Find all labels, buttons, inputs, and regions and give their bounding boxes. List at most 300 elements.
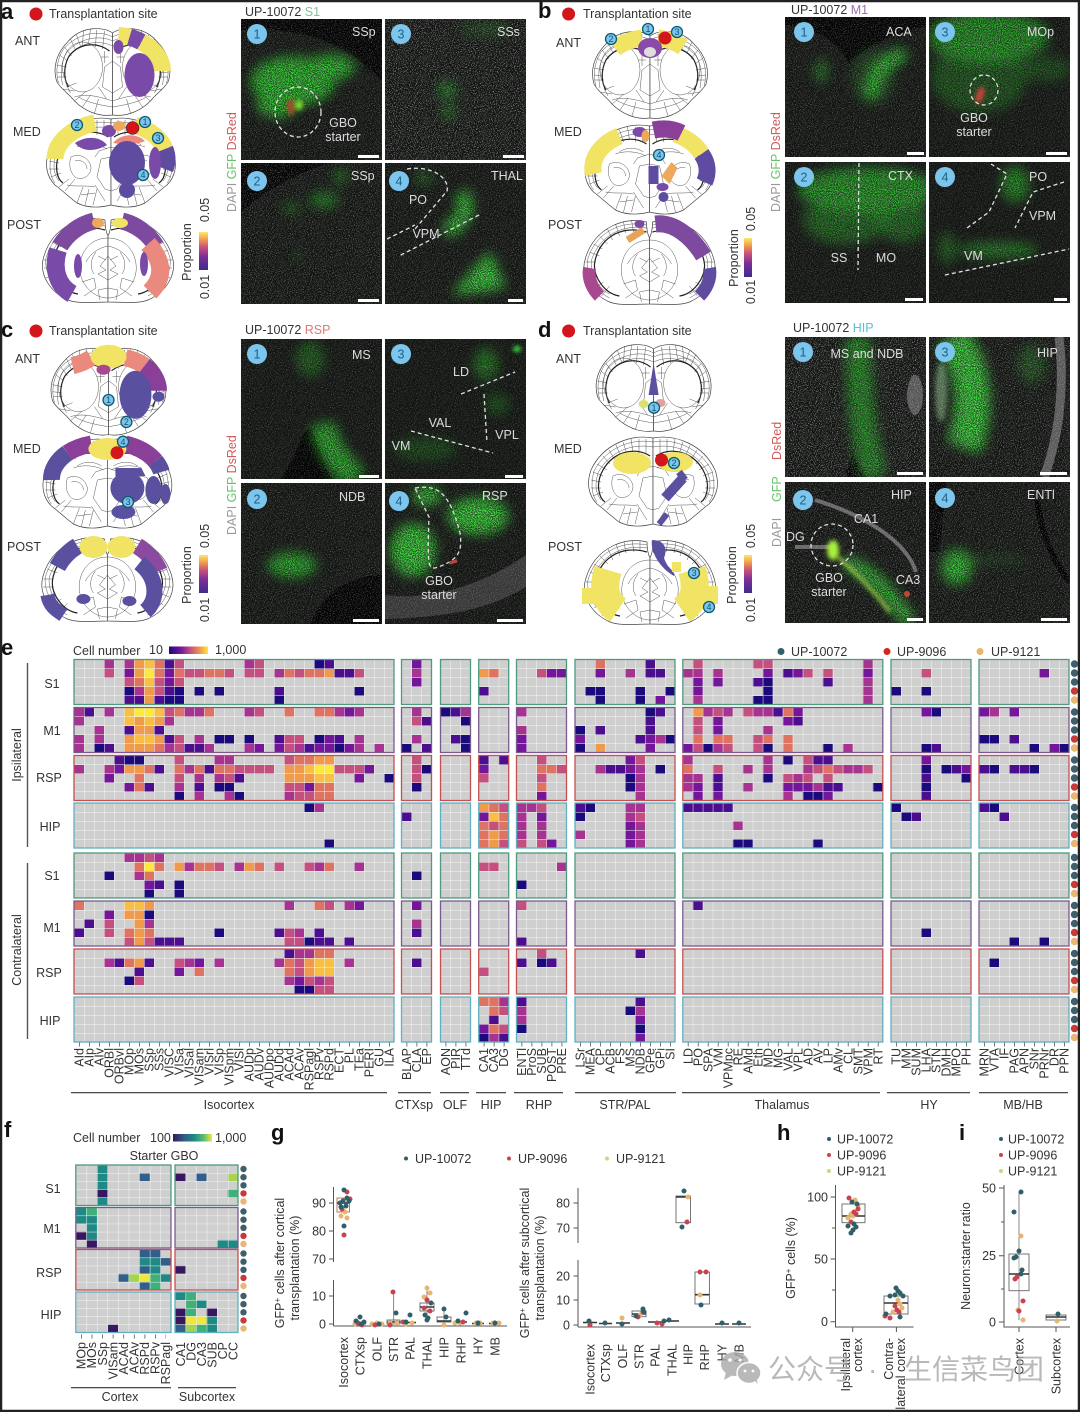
brain section MED: MED xyxy=(554,125,582,139)
region group rules and names: RHP xyxy=(526,1098,552,1112)
micrograph c3 LD VAL VPL VM: VAL xyxy=(429,416,451,430)
column labels: CA1 xyxy=(477,1048,491,1072)
column labels: DG xyxy=(497,1048,511,1067)
column labels: PH xyxy=(960,1048,974,1065)
row labels: S1 xyxy=(44,677,60,691)
chart: after subcortical transplantation: cells after subcortical xyxy=(518,1188,532,1308)
column labels: AIv xyxy=(92,1047,106,1066)
chart: after cortical transplantation: HIP xyxy=(438,1337,452,1358)
row labels: HIP xyxy=(41,1308,61,1322)
colour scale: cell number xyxy=(73,1131,246,1145)
micrograph b4 PO VPM VM: 4 xyxy=(942,170,949,184)
stain labels: DAPI GFP DsRed xyxy=(769,112,783,212)
micrograph b3 MOp xyxy=(929,17,1070,157)
brain section POST xyxy=(7,218,174,302)
brain section ANT: ANT xyxy=(15,352,40,366)
micrograph c4 RSP: starter xyxy=(421,588,457,602)
badges and injection site: 1 xyxy=(106,395,111,405)
chart: after subcortical transplantation: THAL xyxy=(666,1344,680,1376)
column labels: TEa xyxy=(352,1048,366,1071)
chart: after subcortical transplantation: PAL xyxy=(648,1344,662,1367)
panel letter h: h xyxy=(777,1120,790,1145)
contralateral bracket: Contralateral xyxy=(10,914,24,986)
region group rules and names: HIP xyxy=(481,1098,501,1112)
badges and injection site: 2 xyxy=(671,458,677,468)
micrograph a2 SSp: 2 xyxy=(254,174,261,188)
stain labels: DAPI GFP DsRed xyxy=(225,112,239,212)
chart: GFP+ cells: cortex xyxy=(851,1337,865,1372)
colour bar: proportion: 0.01 xyxy=(744,598,758,622)
micrograph c2 NDB xyxy=(241,483,382,624)
micrograph b3 MOp: starter xyxy=(956,125,992,139)
column labels: VPM xyxy=(861,1048,875,1075)
panel d: HIP transplantation xyxy=(538,317,1070,624)
brain section ANT xyxy=(15,345,166,435)
column labels xyxy=(75,1341,240,1384)
legend: samples xyxy=(404,1152,665,1166)
colour bar: proportion: 0.05 xyxy=(198,524,212,548)
row labels: M1 xyxy=(43,724,61,738)
column labels: VAL xyxy=(781,1048,795,1071)
column labels: GPi xyxy=(654,1048,668,1069)
brain section POST: 3 xyxy=(691,568,697,578)
chart: neuron to starter ratio: 25 xyxy=(982,1249,996,1263)
column labels: RSPagl xyxy=(302,1048,316,1090)
colour bar: proportion: 0.01 xyxy=(744,280,758,304)
row labels: RSP xyxy=(36,966,62,980)
badges and injection site: 3 xyxy=(155,133,161,143)
row labels xyxy=(36,677,62,1028)
micrograph c3 LD VAL VPL VM: 3 xyxy=(398,348,405,362)
micrograph a2 SSp: SSp xyxy=(351,169,375,183)
column labels: SPA xyxy=(701,1047,715,1072)
column labels: RSPd xyxy=(322,1048,336,1081)
column labels: CC xyxy=(226,1342,240,1360)
column labels: CP xyxy=(594,1048,608,1065)
brain section ANT xyxy=(15,29,170,115)
column labels: ORBl xyxy=(102,1048,116,1078)
column ticks xyxy=(79,1042,1069,1046)
colour bar: proportion xyxy=(180,524,212,622)
row labels: RSP xyxy=(36,1266,62,1280)
column labels: CL xyxy=(841,1048,855,1064)
brain section POST: POST xyxy=(548,218,582,232)
brain section ANT xyxy=(556,345,711,431)
legend: samples: UP-9096 xyxy=(837,1148,886,1162)
brain section POST xyxy=(548,540,718,624)
column labels: SUB xyxy=(535,1048,549,1074)
micrograph b4 PO VPM VM: PO xyxy=(1029,170,1047,184)
column labels: MOs xyxy=(85,1342,99,1368)
column labels: SSp xyxy=(96,1342,110,1366)
chart: after subcortical transplantation: 20 xyxy=(556,1270,570,1284)
heading: starter GBO: Starter GBO xyxy=(130,1149,199,1163)
chart: after subcortical transplantation: STR xyxy=(632,1344,646,1369)
chart: neuron to starter ratio: 50 xyxy=(982,1182,996,1196)
column labels: TU xyxy=(890,1048,904,1065)
column labels: VISa xyxy=(172,1048,186,1075)
panel letter d: d xyxy=(538,317,551,342)
legend: samples: UP-9096 xyxy=(897,645,946,659)
column labels: ACAv xyxy=(128,1341,142,1374)
stain labels: DsRed xyxy=(770,422,784,460)
column labels: PERI xyxy=(362,1048,376,1077)
column labels: VISam xyxy=(106,1342,120,1380)
chart: after cortical transplantation: OLF xyxy=(370,1337,384,1361)
micrograph b1 ACA: ACA xyxy=(886,25,912,39)
micrograph a3 SSs: 3 xyxy=(398,28,405,42)
brain section POST xyxy=(7,536,173,622)
colour bar: proportion: Proportion xyxy=(180,546,194,604)
micrograph d3 HIP: HIP xyxy=(1037,346,1058,360)
micrograph c4 RSP xyxy=(385,483,526,624)
brain section MED xyxy=(13,394,172,528)
column labels: RSPd xyxy=(138,1342,152,1375)
watermark xyxy=(721,1348,1044,1388)
legend: samples xyxy=(778,645,1040,659)
panel letter f: f xyxy=(4,1117,12,1142)
micrograph b4 PO VPM VM: VPM xyxy=(1029,209,1056,223)
brain section MED: MED xyxy=(13,125,41,139)
chart: GFP+ cells: GFP xyxy=(784,1273,798,1299)
column labels: AIp xyxy=(82,1048,96,1067)
micrograph c4 RSP: GBO xyxy=(425,574,453,588)
region group rules and names xyxy=(71,1093,1068,1112)
micrograph a4 THAL: 4 xyxy=(396,174,403,188)
chart: after cortical transplantation: MB xyxy=(488,1337,502,1356)
region group rules and names: HY xyxy=(920,1098,938,1112)
column labels: MOp xyxy=(75,1342,89,1369)
chart: after cortical transplantation: 70 xyxy=(312,1252,326,1266)
column labels: NDB xyxy=(634,1048,648,1074)
legend: samples: UP-10072 xyxy=(791,645,847,659)
column labels: RT xyxy=(871,1048,885,1064)
column labels: DR xyxy=(1048,1048,1062,1066)
micrograph d3 HIP xyxy=(929,337,1070,477)
column labels: AUDpo xyxy=(262,1048,276,1088)
column labels: VISam xyxy=(192,1048,206,1086)
micrograph c1 MS: MS xyxy=(352,348,371,362)
stain labels: GFP xyxy=(770,476,784,502)
column labels: AId xyxy=(72,1048,86,1067)
chart: after subcortical transplantation: 70 xyxy=(556,1222,570,1236)
micrograph a1 SSp: GBO xyxy=(329,116,357,130)
title: UP-10072 M1 xyxy=(791,3,868,17)
micrograph a1 SSp: SSp xyxy=(352,25,376,39)
micrograph d3 HIP: 3 xyxy=(942,346,949,360)
micrograph d4 ENTl: ENTl xyxy=(1027,488,1055,502)
group rules and names: Subcortex xyxy=(179,1390,236,1404)
chart: neuron to starter ratio xyxy=(959,1182,1070,1394)
colour bar: proportion xyxy=(725,524,758,622)
legend: transplantation site: Transplantation site xyxy=(583,7,692,21)
micrograph a2 SSp xyxy=(241,163,382,304)
micrograph d1 MS and NDB: MS and NDB xyxy=(831,347,903,361)
badges and injection site: 1 xyxy=(645,24,651,34)
column ticks xyxy=(81,1334,166,1338)
micrograph c1 MS: 1 xyxy=(254,348,261,362)
micrograph b2 CTX: SS xyxy=(831,251,847,265)
micrograph a3 SSs: SSs xyxy=(497,25,520,39)
chart: after cortical transplantation: HY xyxy=(472,1336,486,1354)
column labels: VISp xyxy=(212,1048,226,1075)
row labels xyxy=(36,1182,62,1322)
micrograph b2 CTX: CTX xyxy=(888,169,914,183)
legend: samples: UP-10072 xyxy=(837,1132,893,1146)
group rules and names xyxy=(71,1388,236,1404)
chart: after cortical transplantation: + xyxy=(273,1298,282,1302)
column labels: PRNr xyxy=(1038,1048,1052,1079)
chart: after cortical transplantation: 80 xyxy=(312,1224,326,1238)
chart: GFP+ cells: lateral cortex xyxy=(894,1337,908,1410)
column labels: VISl xyxy=(232,1048,246,1071)
chart: GFP+ cells: + xyxy=(784,1268,793,1273)
region group rules and names: STR/PAL xyxy=(599,1098,651,1112)
column labels: MM xyxy=(900,1048,914,1069)
heatmap row: S1 xyxy=(76,1165,247,1206)
chart: after cortical transplantation: PAL xyxy=(404,1337,418,1360)
badges and injection site: 3 xyxy=(125,497,131,507)
watermark text: 公众号 xyxy=(768,1348,852,1388)
micrograph c3 LD VAL VPL VM xyxy=(385,339,526,479)
column labels: VTA xyxy=(988,1047,1002,1071)
stain labels: DAPI xyxy=(770,518,784,547)
colour scale: cell number: 1,000 xyxy=(215,1131,246,1145)
column labels: SUB xyxy=(205,1342,219,1368)
brain section POST: POST xyxy=(7,218,41,232)
micrograph a4 THAL: PO xyxy=(409,193,427,207)
brain section MED xyxy=(554,24,714,214)
column labels: SSp xyxy=(142,1048,156,1072)
legend: samples: UP-9121 xyxy=(1008,1164,1057,1178)
colour bar: proportion: 0.01 xyxy=(198,275,212,299)
chart: after cortical transplantation: GFP xyxy=(273,1302,287,1328)
column labels: VISpm xyxy=(222,1048,236,1086)
chart: after subcortical transplantation: RHP xyxy=(698,1344,712,1370)
chart: after subcortical transplantation: GFP xyxy=(518,1313,532,1338)
column labels: RE xyxy=(731,1048,745,1065)
column labels: PL xyxy=(342,1048,356,1063)
legend: samples: UP-10072 xyxy=(415,1152,471,1166)
micrograph c1 MS xyxy=(241,339,382,479)
micrograph d2 HIP DG CA1 CA3: HIP xyxy=(891,488,912,502)
group rules and names: Cortex xyxy=(102,1390,139,1404)
column labels: AUDv xyxy=(252,1047,266,1081)
row labels: M1 xyxy=(43,921,61,935)
heatmap row: ipsilateral HIP xyxy=(74,803,1078,848)
badges and injection site: 3 xyxy=(674,27,680,37)
column labels: CP xyxy=(216,1342,230,1359)
chart: GFP+ cells: cells (%) xyxy=(784,1217,798,1269)
micrograph c2 NDB: NDB xyxy=(339,490,365,504)
chart: after subcortical transplantation: HIP xyxy=(682,1344,696,1365)
chart: neuron to starter ratio: Subcortex xyxy=(1050,1337,1064,1394)
column labels: BLAP xyxy=(400,1048,414,1080)
micrograph b1 ACA xyxy=(785,17,926,157)
column labels: SNr xyxy=(1028,1048,1042,1070)
micrograph a1 SSp: 1 xyxy=(254,28,261,42)
micrograph c3 LD VAL VPL VM: VM xyxy=(392,439,410,453)
badges and injection site: 4 xyxy=(140,170,146,180)
micrograph b3 MOp: 3 xyxy=(942,26,949,40)
chart: after subcortical transplantation: 10 xyxy=(556,1294,570,1308)
micrograph c2 NDB: 2 xyxy=(254,492,261,506)
colour bar: proportion: Proportion xyxy=(725,546,739,604)
row labels: RSP xyxy=(36,771,62,785)
micrograph d2 HIP DG CA1 CA3: GBO xyxy=(815,571,843,585)
heatmap row: M1 xyxy=(76,1208,247,1248)
micrograph d4 ENTl: 4 xyxy=(942,492,949,506)
chart: after cortical transplantation: cells after cortical xyxy=(273,1198,287,1298)
region group rules and names: Thalamus xyxy=(755,1098,809,1112)
micrograph d4 ENTl xyxy=(929,482,1070,623)
column labels: DG xyxy=(184,1342,198,1361)
colour bar: proportion: Proportion xyxy=(180,223,194,281)
colour scale: cell number: 10 xyxy=(149,643,163,657)
panel letter e: e xyxy=(1,635,13,660)
panel h: ipsilateral versus contralateral cortex xyxy=(777,1120,914,1410)
column labels: RSPv xyxy=(149,1341,163,1374)
colour scale: cell number: Cell number xyxy=(73,1131,140,1145)
colour scale: cell number: Cell number xyxy=(73,644,140,658)
colour bar: proportion xyxy=(180,198,212,299)
brain section ANT: ANT xyxy=(556,352,581,366)
watermark text: · xyxy=(868,1354,877,1385)
heatmap row: contralateral M1 xyxy=(74,901,1078,946)
badges and injection site xyxy=(655,454,680,468)
row labels: HIP xyxy=(40,1014,60,1028)
chart: GFP+ cells xyxy=(784,1185,914,1410)
stain labels: DAPI GFP DsRed xyxy=(225,435,239,535)
chart: neuron to starter ratio: Cortex xyxy=(1012,1337,1026,1375)
panel f: starter GBO heatmap xyxy=(4,1117,247,1404)
region group rules and names: Isocortex xyxy=(204,1098,255,1112)
chart: GFP+ cells: 50 xyxy=(814,1252,828,1266)
chart: after subcortical transplantation: + xyxy=(518,1308,527,1313)
chart: after subcortical transplantation: 0 xyxy=(563,1318,570,1332)
chart: after cortical transplantation: RHP xyxy=(454,1337,468,1363)
title: UP-10072 S1 xyxy=(245,5,320,19)
heatmap row: contralateral RSP xyxy=(74,949,1078,994)
column labels: APN xyxy=(1018,1048,1032,1074)
chart: after subcortical transplantation: transplantation (%) xyxy=(533,1216,547,1320)
badges and injection site: 4 xyxy=(120,437,126,447)
micrograph d2 HIP DG CA1 CA3: CA1 xyxy=(854,512,878,526)
chart: after subcortical transplantation: HY xyxy=(716,1343,730,1361)
column labels: VISal xyxy=(182,1048,196,1078)
title: UP-10072 HIP xyxy=(793,321,874,335)
column labels: LD xyxy=(681,1048,695,1064)
panel a: S1 transplantation xyxy=(1,0,526,304)
column labels: RSPv xyxy=(312,1047,326,1080)
column labels: AON xyxy=(439,1048,453,1075)
brain section MED xyxy=(13,116,175,207)
chart: GFP+ cells: 100 xyxy=(807,1190,828,1204)
column labels: AD xyxy=(801,1048,815,1065)
colour scale: cell number: 100 xyxy=(150,1131,171,1145)
watermark text: 生信菜鸟团 xyxy=(904,1348,1044,1388)
micrograph b3 MOp: MOp xyxy=(1027,25,1054,39)
micrograph c3 LD VAL VPL VM: VPL xyxy=(495,428,519,442)
chart: after subcortical transplantation: OLF xyxy=(616,1344,630,1368)
brain section MED xyxy=(554,437,717,526)
chart: GFP+ cells: Ipsilateral xyxy=(839,1338,853,1392)
column labels: Eth xyxy=(751,1048,765,1067)
panel e: cell number heatmap xyxy=(1,635,1078,1112)
panel letter c: c xyxy=(1,317,13,342)
row labels: S1 xyxy=(45,1182,61,1196)
column labels: AMv xyxy=(831,1047,845,1073)
column labels: AUDd xyxy=(272,1048,286,1081)
column labels: GU xyxy=(372,1048,386,1067)
column labels: EP xyxy=(420,1048,434,1065)
chart: GFP+ cells: Contra- xyxy=(882,1338,896,1380)
column labels: SUM xyxy=(910,1048,924,1076)
row labels: M1 xyxy=(43,1222,61,1236)
panel g: GFP+ cell distributions xyxy=(271,1120,751,1395)
chart: after cortical transplantation: STR xyxy=(387,1337,401,1362)
colour bar: proportion: Proportion xyxy=(727,229,741,287)
brain section POST xyxy=(548,218,715,304)
chart: after cortical transplantation xyxy=(273,1187,507,1388)
stain labels xyxy=(770,422,784,547)
chart: after subcortical transplantation: Isocortex xyxy=(584,1343,598,1395)
column labels: ENTl xyxy=(515,1048,529,1076)
column labels: SSs xyxy=(152,1048,166,1071)
brain section MED: MED xyxy=(13,442,41,456)
colour bar: proportion: 0.05 xyxy=(198,198,212,222)
chart: after cortical transplantation: transplantation (%) xyxy=(288,1216,302,1320)
column labels: ECT xyxy=(332,1048,346,1073)
micrograph d1 MS and NDB: 1 xyxy=(800,346,807,360)
column labels: VPMpc xyxy=(721,1048,735,1088)
chart: neuron to starter ratio: 0 xyxy=(989,1316,996,1330)
legend: samples: UP-10072 xyxy=(1008,1132,1064,1146)
chart: after cortical transplantation: Isocortex xyxy=(337,1336,351,1388)
column labels: MS xyxy=(624,1048,638,1067)
chart: GFP+ cells: 0 xyxy=(821,1315,828,1329)
heatmap row: ipsilateral RSP xyxy=(74,756,1078,800)
brain section ANT: ANT xyxy=(556,36,581,50)
panel letter i: i xyxy=(959,1120,965,1145)
heatmap row: HIP xyxy=(76,1292,247,1332)
micrograph c4 RSP: 4 xyxy=(396,494,403,508)
column labels: AV xyxy=(811,1047,825,1064)
legend: samples: UP-9096 xyxy=(1008,1148,1057,1162)
micrograph a1 SSp xyxy=(241,19,382,160)
column labels: GPe xyxy=(644,1048,658,1073)
column labels: ACAv xyxy=(292,1047,306,1080)
column labels: PO xyxy=(691,1048,705,1066)
column labels: AMd xyxy=(741,1048,755,1074)
badges and injection site: 4 xyxy=(656,150,662,160)
micrograph d1 MS and NDB xyxy=(785,337,926,477)
row labels: HIP xyxy=(40,820,60,834)
micrograph b1 ACA: 1 xyxy=(801,26,808,40)
column labels: LHA xyxy=(920,1047,934,1072)
legend: samples xyxy=(999,1132,1064,1178)
micrograph b4 PO VPM VM: VM xyxy=(964,249,983,263)
badges and injection site: 1 xyxy=(142,117,148,127)
column labels: CA1 xyxy=(174,1342,188,1366)
legend: samples: UP-9096 xyxy=(518,1152,567,1166)
brain section POST: 4 xyxy=(706,602,712,612)
heatmap row: ipsilateral M1 xyxy=(74,708,1078,752)
column labels: CA3 xyxy=(487,1048,501,1072)
title: UP-10072 RSP xyxy=(245,323,330,337)
micrograph b2 CTX: 2 xyxy=(801,170,808,184)
column labels: ProS xyxy=(525,1048,539,1076)
